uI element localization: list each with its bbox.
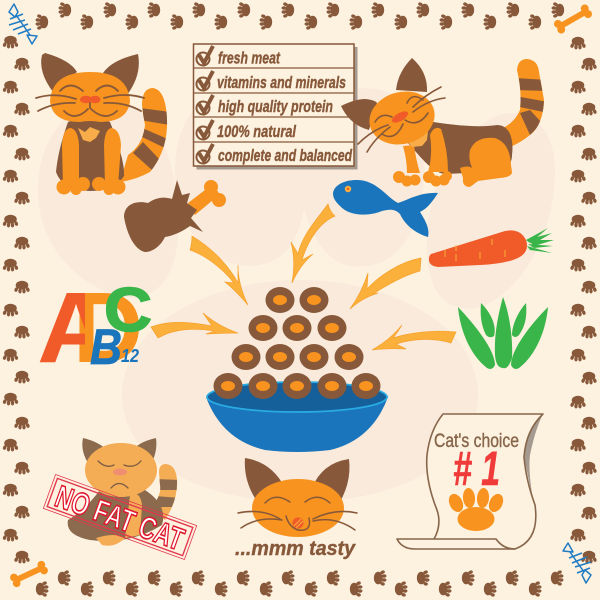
arrow: vitamins to bowl [151,313,238,338]
checkmarks [196,46,213,164]
checklist text: high quality protein [218,97,333,116]
tasty cat face [238,458,357,537]
big faint paw print [38,84,555,502]
icon: green plant [458,297,548,369]
panel: ingredient checklist [193,44,358,170]
icon: fish [333,180,438,237]
checklist text: fresh meat [218,48,281,68]
icon: fish skeleton bottom right [563,543,591,583]
icon: vitamin letters: A [37,272,115,384]
kibble pile [214,287,380,399]
cat's choice scroll [397,414,543,549]
bowl [206,382,388,452]
caption: mmm tasty: ...mmm tasty [235,538,356,560]
icon: vitamin letters: 12 [121,346,139,366]
checklist text [217,48,352,165]
no fat cat [43,438,197,560]
arrow: fish to bowl [291,204,335,283]
sitting cat [36,53,170,195]
checklist text: 100% natural [217,122,297,141]
icon: chicken leg [124,180,226,252]
icon: orange paw [446,488,506,531]
icon: fish skeleton top left [9,4,37,44]
stamp: no fat cat [43,475,197,560]
icon: vitamin letters: C [104,276,152,345]
walking cat [341,58,548,187]
scroll heading: Cat's choice [434,431,519,452]
checklist text: vitamins and minerals [217,73,346,92]
arrow: carrot to bowl [350,258,421,309]
rank number: # 1 [453,443,500,496]
icon: vitamin letters: D [73,272,143,384]
arrow: meat to bowl [190,236,248,305]
checklist text: complete and balanced [218,146,352,165]
arrow: plant to bowl [372,325,456,350]
icon: vitamin letters [40,286,152,364]
icon: bone bottom left [9,560,49,588]
icon: bone top right [553,3,593,35]
icon: carrot [429,228,554,267]
icon: vitamin letters: B [90,319,122,375]
stamp: no fat cat: NO FAT CAT [51,479,189,557]
